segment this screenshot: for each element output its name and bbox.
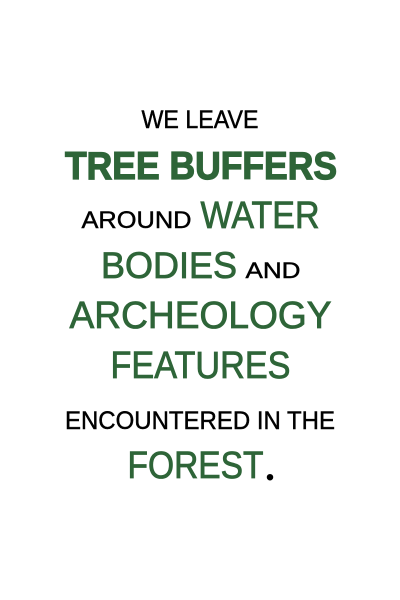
highlight: forest: FOREST xyxy=(128,445,264,487)
text: we leave: WE LEAVE xyxy=(142,106,258,134)
highlight: features: FEATURES xyxy=(110,345,290,387)
text: encountered in the: ENCOUNTERED IN THE xyxy=(65,407,335,435)
closing period: . xyxy=(265,444,275,489)
heading: tree buffers: TREE BUFFERS xyxy=(65,145,337,188)
highlight: archeology: ARCHEOLOGY xyxy=(70,295,332,337)
highlight: water: WATER xyxy=(200,195,320,237)
text: around: AROUND xyxy=(82,207,192,234)
highlight: bodies: BODIES xyxy=(101,245,237,286)
text: and: AND xyxy=(246,258,300,283)
